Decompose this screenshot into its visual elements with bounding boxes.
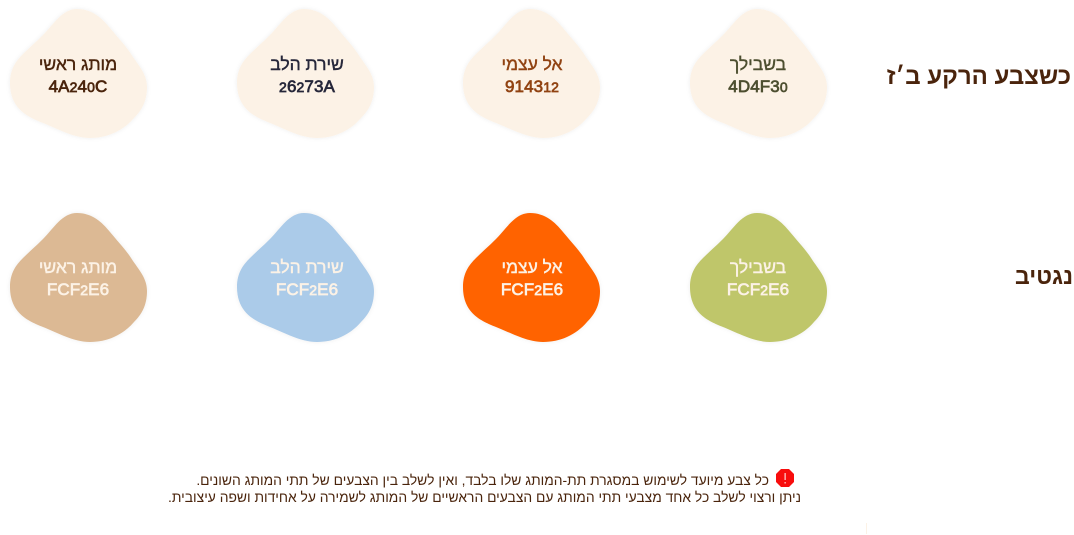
swatch: heart negative bbox=[237, 213, 374, 342]
swatch: main brand negative: FCF2E6 bbox=[47, 280, 109, 299]
heading: row one: כשצבע הרקע ב׳ז bbox=[887, 63, 1071, 90]
swatch: core light: אל עצמי bbox=[501, 54, 563, 74]
swatch: path light: 4D4F30 bbox=[728, 77, 788, 96]
swatch: path negative bbox=[690, 213, 827, 342]
swatch: path light bbox=[690, 9, 827, 138]
footnote: ניתן ורצוי לשלב כל אחד מצבעי תתי המותג עם הצבעים הראשיים של המותג לשמירה על אחידות ושפה עיצובית. bbox=[168, 489, 801, 505]
swatch: path light: בשבילך bbox=[730, 54, 786, 74]
swatch: heart light bbox=[237, 9, 374, 138]
swatch: core light: 914312 bbox=[505, 77, 559, 96]
swatch: heart negative: שירת הלב bbox=[270, 257, 344, 277]
swatch: core negative: אל עצמי bbox=[501, 257, 563, 277]
swatch: heart light: 26273A bbox=[279, 77, 335, 96]
swatch: core light bbox=[463, 9, 600, 138]
footnote: כל צבע מיועד לשימוש במסגרת תת-המותג שלו בלבד, ואין לשלב בין הצבעים של תתי המותג השונים. bbox=[196, 472, 769, 488]
swatch: main brand negative: מותג ראשי bbox=[39, 257, 117, 277]
swatch: heart negative: FCF2E6 bbox=[276, 280, 338, 299]
swatch: heart light: שירת הלב bbox=[270, 54, 344, 74]
swatch: main brand light: מותג ראשי bbox=[39, 54, 117, 74]
swatch: core negative: FCF2E6 bbox=[501, 280, 563, 299]
footnote bbox=[168, 472, 801, 505]
swatch: main brand light: 4A240C bbox=[49, 77, 107, 96]
heading: row two: נגטיב bbox=[1015, 263, 1073, 289]
icon: warning bbox=[776, 469, 794, 487]
swatch: path negative: FCF2E6 bbox=[727, 280, 789, 299]
swatch: core negative bbox=[463, 213, 600, 342]
swatch: path negative: בשבילך bbox=[730, 257, 786, 277]
swatch: main brand negative bbox=[10, 213, 147, 342]
swatch: main brand light bbox=[10, 9, 147, 138]
